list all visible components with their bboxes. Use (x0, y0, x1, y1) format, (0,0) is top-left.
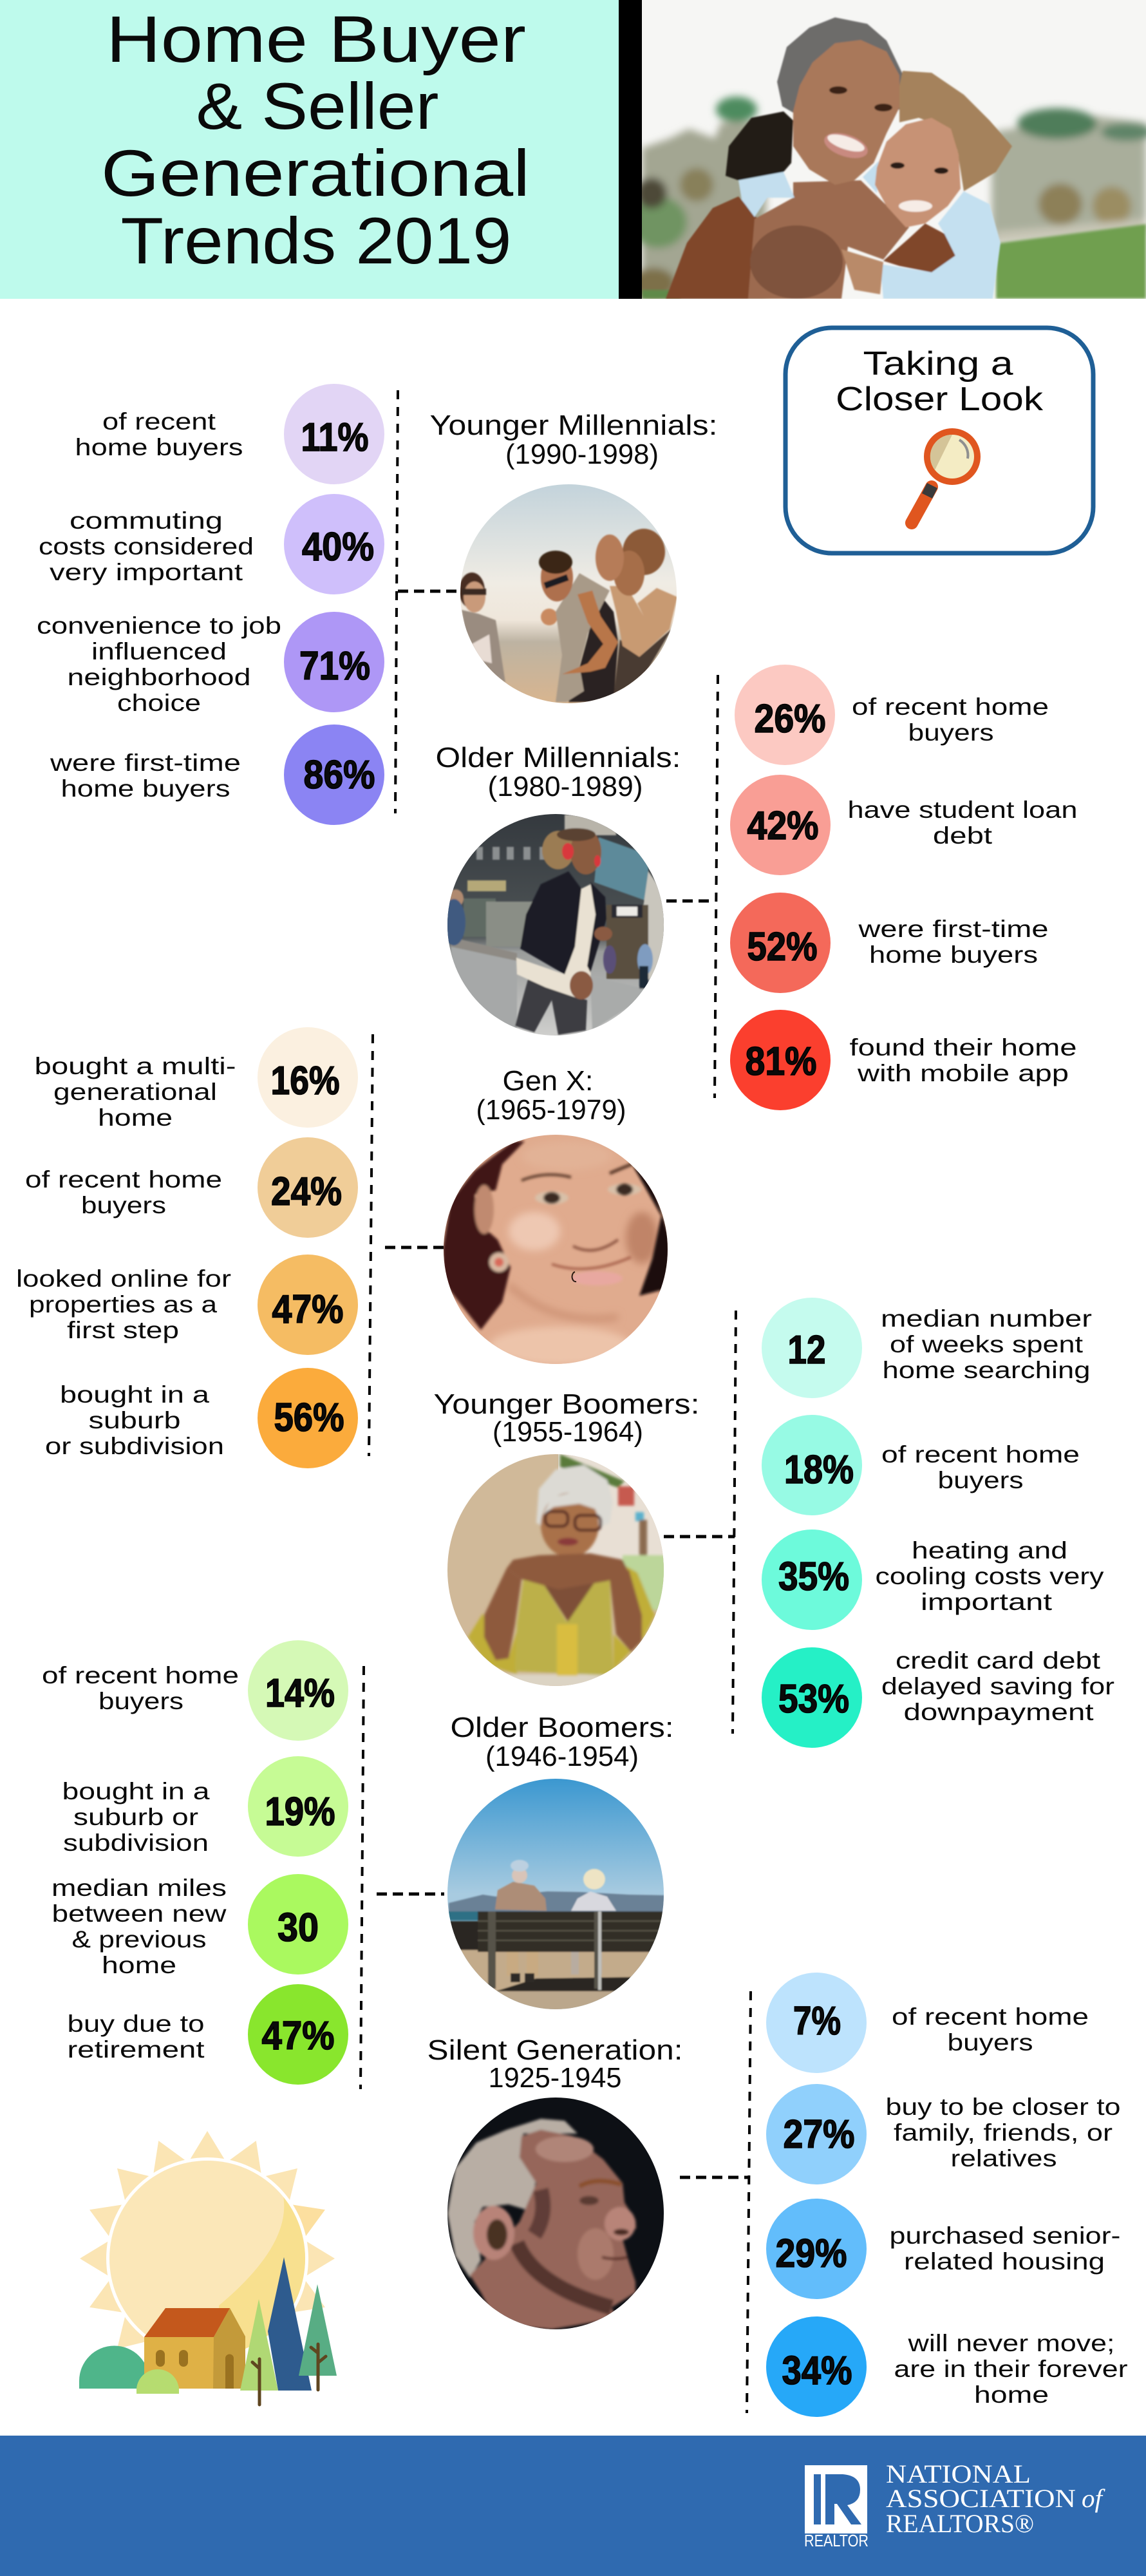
stat label: buy due to retirement: retirement (67, 2036, 205, 2063)
stat label: median miles: median miles (52, 1875, 227, 1901)
stat: 27% (766, 2084, 867, 2184)
stat label: bought a multi-generational home: generational (53, 1079, 217, 1105)
stat: 24%: 24% (271, 1170, 342, 1214)
stat: 12: 12 (788, 1328, 825, 1372)
stat label: convenience to job: convenience to job (37, 612, 281, 639)
stat label: of recent home buyers: buyers (948, 2029, 1033, 2056)
stat label: heating and cooling: heating and (912, 1537, 1067, 1564)
stat: 18% (762, 1415, 862, 1515)
stat: 86%: 86% (304, 753, 375, 797)
title: Trends 2019 (121, 204, 511, 278)
stat label: credit card debt: downpayment (904, 1699, 1094, 1725)
stat label: of recent home buyers: home buyers (75, 434, 243, 460)
heading: gen x: Gen X: (502, 1065, 594, 1097)
stat label: of recent home buyers (25, 1166, 222, 1218)
stat: 52% (730, 893, 831, 993)
title: Home Buyer (106, 3, 526, 76)
stat label: median weeks (881, 1305, 1092, 1383)
stat: 47% (258, 1255, 358, 1355)
heading: younger boomers: Younger Boomers: (434, 1388, 699, 1420)
stat: 35%: 35% (778, 1555, 849, 1599)
stat label: were first-time home buyers: home buyers (61, 775, 230, 802)
stat: 16%: 16% (270, 1059, 340, 1103)
heading: silent generation: Silent Generation: (427, 2034, 682, 2066)
stat label: found their home with mobile app (850, 1034, 1076, 1086)
stat: 35% (762, 1530, 862, 1630)
stat: 47%: 47% (261, 2014, 335, 2058)
connector (361, 1666, 444, 2089)
stat label: were first-time home buyers: home buyers (869, 942, 1038, 968)
logo: realtor R block (804, 2465, 869, 2550)
stat label: bought in a suburb: suburb or (73, 1804, 198, 1830)
panel: silent generation (427, 1973, 1128, 2417)
stat: 47% (248, 1984, 348, 2085)
stat label: convenience to job: choice (117, 690, 201, 716)
stat: 11%: 11% (301, 415, 368, 460)
heading: gen x (476, 1065, 626, 1126)
stat label: will never move: home (974, 2382, 1049, 2408)
stat: 24% (258, 1137, 358, 1238)
stat: 26% (735, 665, 835, 765)
stat: 53% (762, 1647, 862, 1748)
heading: older millennials: (1980-1989) (488, 771, 643, 802)
heading: younger boomers (434, 1388, 699, 1448)
stat label: median weeks: median number (881, 1305, 1092, 1332)
logo: national association of realtors wordmark: NATIONAL (886, 2459, 1031, 2488)
stat: 7%: 7% (793, 1999, 841, 2043)
heading: younger millennials (430, 410, 717, 470)
stat label: looked online: looked online for (16, 1265, 231, 1292)
stat label: of recent home buyers: of recent home (892, 2003, 1089, 2030)
stat label: heating and cooling: important (921, 1589, 1053, 1615)
stat: 26%: 26% (755, 697, 825, 741)
stat: 14% (248, 1640, 348, 1741)
heading: older boomers (451, 1712, 673, 1772)
callout: taking a closer look: Closer Look (836, 381, 1044, 418)
stat label: looked online: first step (67, 1317, 179, 1343)
stat: 52%: 52% (747, 925, 818, 969)
photo: couple on a bench (447, 1777, 666, 2011)
stat label: senior-related housing: purchased senior- (890, 2222, 1120, 2249)
stat: 40%: 40% (302, 525, 374, 569)
stat label: of recent home buyers: buyers (908, 719, 994, 746)
stat label: of recent home buyers: of recent home (42, 1662, 239, 1689)
stat: 71%: 71% (299, 644, 370, 688)
illustration: sun, house and trees (79, 2131, 337, 2405)
stat: 56%: 56% (274, 1396, 344, 1440)
stat: 29% (766, 2199, 867, 2299)
stat: 16% (258, 1027, 358, 1128)
stat: 27%: 27% (783, 2112, 855, 2157)
stat label: credit card debt (881, 1647, 1114, 1725)
panel: older boomers (42, 1640, 673, 2089)
heading: older millennials (435, 742, 681, 802)
stat: 40% (284, 494, 384, 594)
stat label: of recent home buyers (852, 694, 1049, 746)
stat label: bought a multi-generational home: home (98, 1104, 173, 1131)
connector (369, 1034, 444, 1456)
stat label: commuting costs: commuting (70, 507, 223, 534)
stat label: credit card debt: delayed saving for (881, 1673, 1114, 1700)
stat: 81%: 81% (746, 1039, 816, 1084)
heading: gen x: (1965-1979) (476, 1094, 626, 1126)
stat label: of recent home buyers: of recent (102, 408, 216, 435)
stat label: convenience to job: influenced (91, 638, 227, 665)
photo: smiling woman portrait (443, 1133, 670, 1365)
stat label: looked online: properties as a (29, 1291, 217, 1318)
stat: 12 (762, 1298, 862, 1398)
stat label: closer to family (886, 2094, 1120, 2172)
heading: older boomers: Older Boomers: (451, 1712, 673, 1743)
title: Generational (101, 137, 530, 210)
stat label: closer to family: relatives (950, 2145, 1057, 2172)
stat label: bought in a suburb: bought in a (62, 1778, 210, 1804)
connector (666, 675, 718, 1098)
icon: house (136, 2308, 245, 2394)
stat label: median miles: between new (52, 1900, 227, 1927)
stat: 19% (248, 1756, 348, 1857)
stat label: buy due to retirement: buy due to (67, 2011, 205, 2037)
stat label: looked online (16, 1265, 231, 1343)
stat label: will never move: will never move; (907, 2330, 1115, 2356)
stat: 30 (248, 1874, 348, 1975)
stat label: of recent home buyers: of recent home (881, 1441, 1080, 1468)
stat label: buy due to retirement (67, 2011, 205, 2063)
photo: older man in profile (447, 2098, 666, 2329)
stat label: bought a multi-generational home (35, 1053, 236, 1131)
stat label: credit card debt: credit card debt (896, 1647, 1101, 1674)
stat label: bought a multi-generational home: bought a multi- (35, 1053, 236, 1079)
stat label: have student loan debt (847, 797, 1078, 849)
header banner (0, 0, 1146, 299)
stat label: of recent home buyers (42, 1662, 239, 1714)
heading: younger millennials: Younger Millennials: (430, 410, 717, 441)
panel: younger millennials (37, 384, 717, 825)
stat label: bought in a suburb: suburb (89, 1407, 180, 1434)
logo: national association of realtors wordmark: ASSOCIATION (886, 2484, 1076, 2513)
header photo: grandmother and child (629, 0, 1146, 299)
stat label: senior-related housing (890, 2222, 1120, 2275)
stat label: found their home with mobile app: found their home (850, 1034, 1076, 1061)
stat label: were first-time home buyers (50, 750, 241, 802)
stat: 34% (766, 2316, 867, 2417)
stat label: heating and cooling (876, 1537, 1104, 1615)
stat: 81% (730, 1010, 831, 1110)
stat: 53%: 53% (778, 1677, 849, 1721)
stat label: will never move: are in their forever (894, 2356, 1128, 2382)
stat: 71% (284, 612, 384, 712)
stat label: commuting costs: very important (50, 559, 243, 585)
stat: 47%: 47% (272, 1287, 344, 1332)
stat label: were first-time home buyers: were first-time (50, 750, 241, 776)
stat label: closer to family: family, friends, or (894, 2119, 1113, 2146)
connector (395, 390, 456, 813)
stat label: senior-related housing: related housing (904, 2248, 1105, 2275)
stat label: were first-time home buyers: were first-time (858, 916, 1048, 942)
stat label: of recent home buyers: buyers (99, 1688, 183, 1714)
stat label: closer to family: buy to be closer to (886, 2094, 1120, 2120)
stat label: of recent home buyers (881, 1441, 1080, 1493)
heading: younger boomers: (1955-1964) (493, 1416, 643, 1448)
stat label: found their home with mobile app: with mobile app (857, 1060, 1069, 1086)
stat label: commuting costs (39, 507, 254, 585)
icon: magnifying glass (912, 428, 981, 523)
stat: 56% (258, 1368, 358, 1468)
stat label: have student loan debt: debt (933, 822, 993, 849)
heading: silent generation: 1925-1945 (488, 2062, 622, 2094)
callout: taking a closer look (785, 328, 1093, 553)
stat label: median miles: & previous (72, 1926, 206, 1953)
stat: 18%: 18% (784, 1448, 854, 1492)
footer band (0, 2436, 1146, 2576)
stat: 34%: 34% (782, 2349, 852, 2393)
stat label: of recent home buyers: of recent home (852, 694, 1049, 720)
stat: 29%: 29% (775, 2231, 847, 2276)
photo: group of friends (459, 484, 679, 703)
heading: younger millennials: (1990-1998) (505, 439, 659, 470)
photo: older woman with glasses (447, 1454, 668, 1687)
heading: silent generation (427, 2034, 682, 2094)
stat: 86% (284, 724, 384, 825)
stat label: median weeks: home searching (882, 1357, 1091, 1383)
callout: taking a closer look: Taking a (863, 345, 1013, 383)
stat label: will never move (894, 2330, 1128, 2408)
stat label: median weeks: of weeks spent (890, 1331, 1084, 1358)
panel: younger boomers (434, 1298, 1114, 1748)
logo: realtor R block: REALTOR (804, 2531, 869, 2550)
logo: national association of realtors wordmark: of (1082, 2484, 1105, 2513)
panel: gen x (16, 1027, 670, 1468)
logo: national association of realtors wordmark (886, 2459, 1105, 2538)
stat label: were first-time home buyers (858, 916, 1048, 968)
stat label: of recent home buyers: buyers (937, 1467, 1024, 1493)
stat: 11% (284, 384, 384, 484)
stat label: median miles: home (102, 1952, 176, 1978)
title: & Seller (196, 70, 439, 143)
stat label: of recent home buyers (892, 2003, 1089, 2056)
connector (680, 1991, 751, 2413)
photo: woman walking with headphones (442, 813, 666, 1037)
stat label: convenience to job (37, 612, 281, 716)
stat label: bought in a suburb (45, 1381, 224, 1459)
stat label: of recent home buyers (75, 408, 243, 460)
stat label: bought in a suburb: subdivision (63, 1830, 209, 1856)
connector (664, 1311, 736, 1734)
title (101, 3, 530, 278)
stat label: convenience to job: neighborhood (67, 664, 251, 690)
stat label: bought in a suburb: bought in a (60, 1381, 210, 1408)
stat: 19%: 19% (265, 1790, 335, 1834)
stat: 42% (730, 775, 831, 875)
heading: older boomers: (1946-1954) (485, 1741, 639, 1772)
stat label: of recent home buyers: buyers (81, 1192, 166, 1218)
stat label: bought in a suburb: or subdivision (45, 1433, 224, 1459)
stat label: have student loan debt: have student loan (847, 797, 1078, 823)
stat label: median miles (52, 1875, 227, 1978)
panel: older millennials (435, 665, 1078, 1110)
stat: 7% (766, 1973, 867, 2073)
stat: 14%: 14% (265, 1671, 335, 1716)
stat label: of recent home buyers: of recent home (25, 1166, 222, 1193)
stat: 42%: 42% (747, 804, 819, 848)
stat label: heating and cooling: cooling costs very (876, 1563, 1104, 1589)
heading: older millennials: Older Millennials: (435, 742, 681, 773)
icon: bushes (79, 2345, 179, 2394)
icon: trees (240, 2257, 337, 2405)
stat: 30: 30 (277, 1906, 319, 1950)
stat label: bought in a suburb (62, 1778, 210, 1856)
logo: national association of realtors wordmark: REALTORS® (886, 2509, 1034, 2538)
stat label: commuting costs: costs considered (39, 533, 254, 560)
